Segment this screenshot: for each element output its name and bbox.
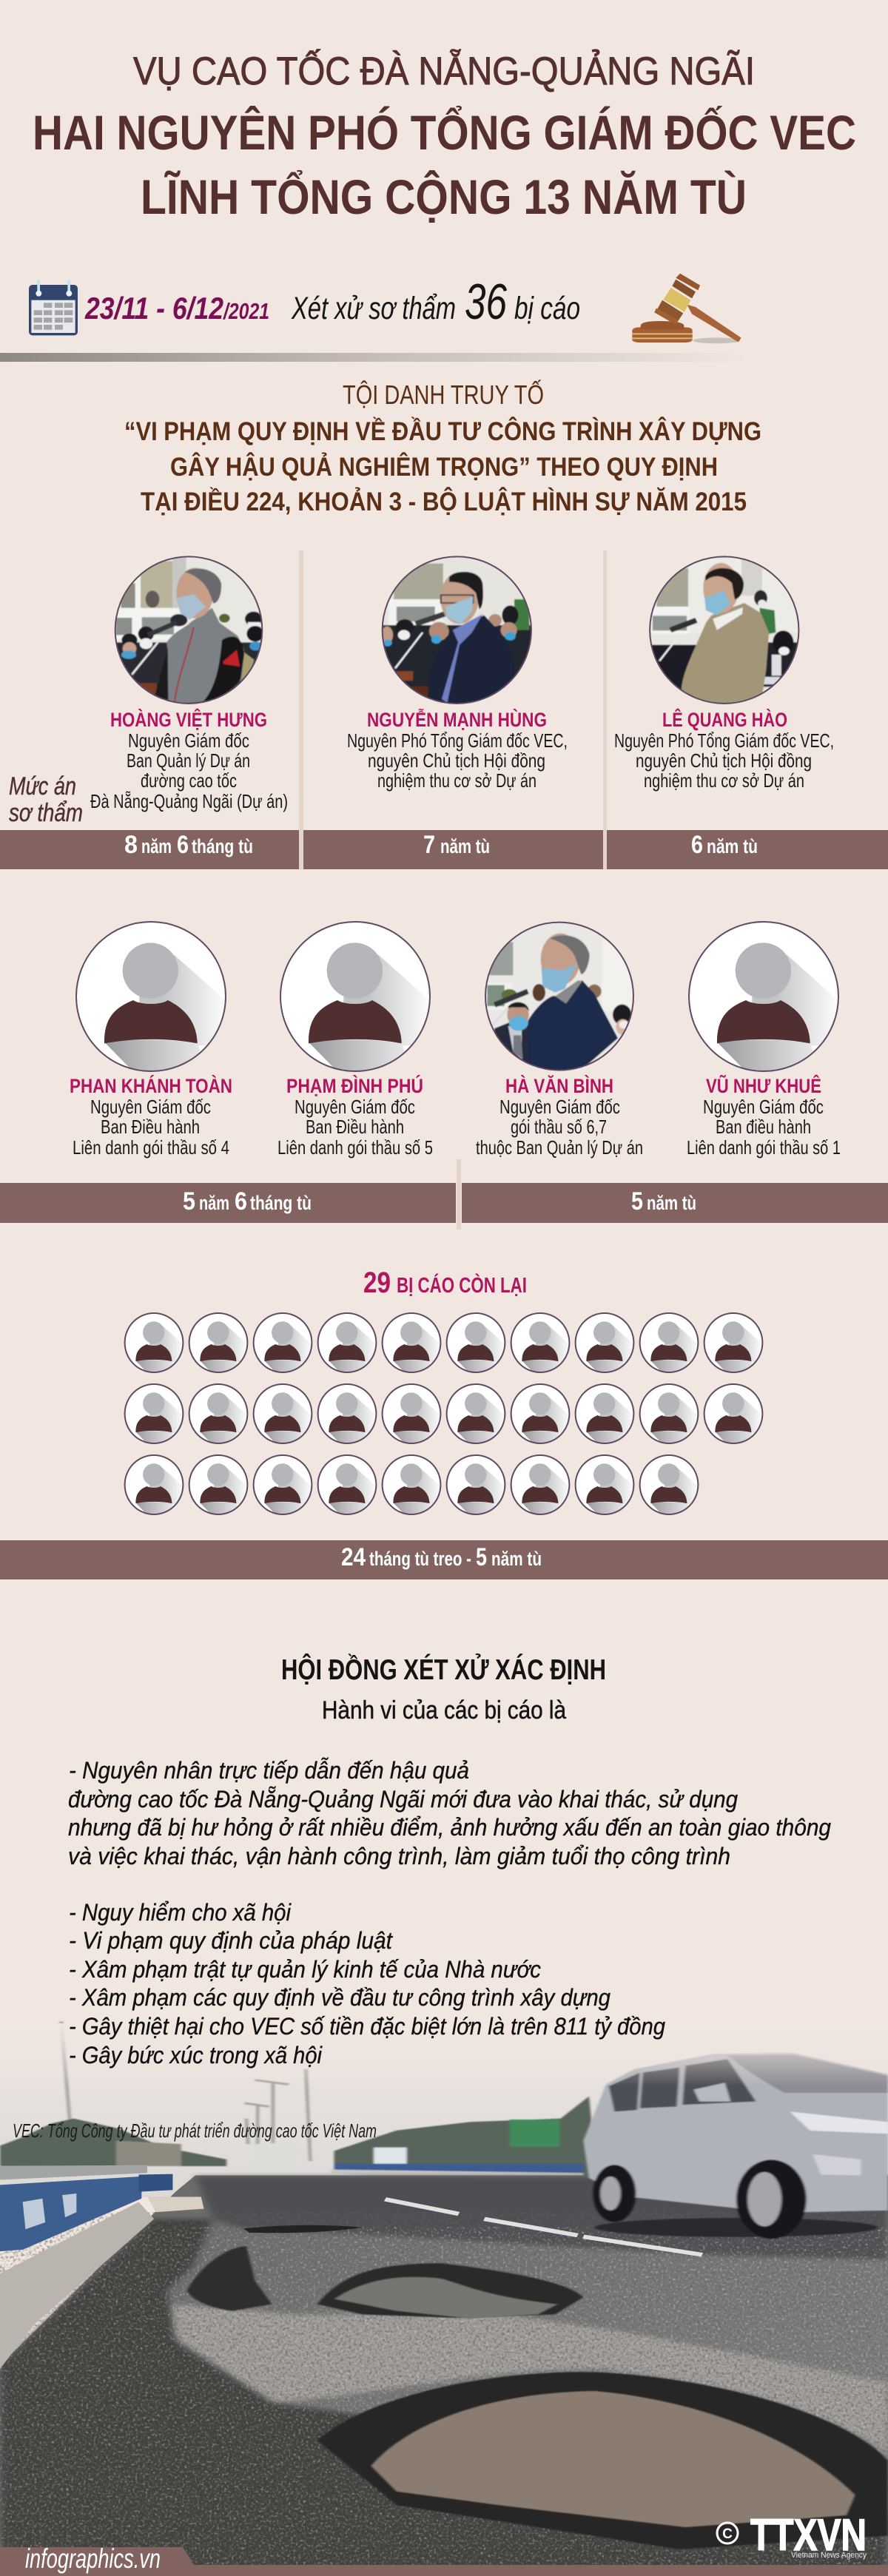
person 5: Phạm Đình Phú: Liên danh gói thầu số 5 (278, 1136, 433, 1159)
sentence bar: 5 years 6 months (0, 1183, 456, 1223)
sentence label: Mức án (9, 772, 76, 800)
sentence bar: 8 years 6 months: 6 (177, 831, 189, 859)
defendants count: Xét xử sơ thẩm (291, 291, 456, 326)
sentence bar: remaining defendants (0, 1540, 888, 1579)
sentence label: sơ thẩm (9, 799, 83, 827)
gravel texture (0, 2212, 888, 2576)
verdict paragraph (68, 1757, 831, 1869)
person 2: Nguyễn Mạnh Hùng: NGUYỄN MẠNH HÙNG (367, 708, 547, 731)
person 7: Vũ Như Khuê: Liên danh gói thầu số 1 (687, 1136, 841, 1159)
verdict paragraph: - Nguyên nhân trực tiếp dẫn đến hậu quả (69, 1757, 469, 1784)
person 7: Vũ Như Khuê: Ban điều hành (716, 1116, 811, 1138)
sentence bar: 6 years: năm tù (707, 835, 758, 857)
title (33, 48, 856, 224)
sentence bar: 5 years: 5 (631, 1187, 643, 1215)
title: VỤ CAO TỐC ĐÀ NẴNG-QUẢNG NGÃI (133, 48, 755, 93)
logo: TTXVN: Vietnam News Agency (791, 2551, 867, 2560)
sentence bar: 7 years (303, 830, 603, 869)
person 5: Phạm Đình Phú: PHẠM ĐÌNH PHÚ (286, 1074, 423, 1097)
logo: TTXVN (717, 2510, 867, 2560)
portrait placeholder: Phạm Đình Phú (275, 917, 437, 1076)
charge text: TẠI ĐIỀU 224, KHOẢN 3 - BỘ LUẬT HÌNH SỰ NĂM 2015 (141, 487, 747, 516)
person 5: Phạm Đình Phú: Nguyên Giám đốc (295, 1096, 415, 1118)
sentence bar: 5 years 6 months: 5 (183, 1187, 195, 1215)
person 1: Hoàng Việt Hưng (90, 708, 288, 812)
defendants count: 36 (465, 274, 507, 330)
title: LĨNH TỔNG CỘNG 13 NĂM TÙ (141, 169, 747, 224)
sentence bar: 6 years (607, 830, 888, 869)
sentence bar: 5 years: năm tù (647, 1192, 696, 1214)
verdict list (69, 1899, 665, 2068)
person 6: Hà Văn Bình: Nguyên Giám đốc (500, 1096, 620, 1118)
icon grid: 29 defendants (122, 1312, 765, 1516)
heading: remaining defendants (363, 1267, 527, 1299)
sentence label (9, 772, 83, 827)
footer strip: infographics.vn: infographics.vn (25, 2543, 161, 2574)
person 7: Vũ Như Khuê: Nguyên Giám đốc (703, 1096, 824, 1118)
sentence bar: 5 years 6 months: tháng tù (250, 1192, 312, 1214)
person 6: Hà Văn Bình: HÀ VĂN BÌNH (505, 1074, 613, 1097)
sentence bar: 5 years (462, 1183, 888, 1223)
person 1: Hoàng Việt Hưng: Ban Quản lý Dự án (127, 749, 250, 772)
verdict list: - Nguy hiểm cho xã hội (69, 1899, 292, 1926)
trial dates: 23/11 - 6/12 (84, 291, 223, 326)
charge heading: TỘI DANH TRUY TỐ (343, 379, 544, 410)
sentence bar: remaining defendants: tháng tù treo - (369, 1548, 471, 1570)
person 1: Hoàng Việt Hưng: Nguyên Giám đốc (128, 729, 249, 752)
charge text (124, 417, 761, 516)
person 6: Hà Văn Bình: gói thầu số 6,7 (511, 1116, 607, 1138)
trial dates: /2021 (222, 298, 269, 324)
sentence bar: 8 years 6 months (0, 830, 299, 869)
sentence bar: 8 years 6 months: tháng tù (192, 835, 253, 857)
portrait: Hà Văn Bình (485, 922, 634, 1071)
portrait: Hoàng Việt Hưng (114, 556, 263, 704)
person 7: Vũ Như Khuê (687, 1074, 841, 1159)
verdict list: - Vi phạm quy định của pháp luật (69, 1927, 393, 1954)
charge text: “VI PHẠM QUY ĐỊNH VỀ ĐẦU TƯ CÔNG TRÌNH XÂY DỰNG (124, 417, 761, 446)
verdict paragraph: và việc khai thác, vận hành công trình, làm giảm tuổi thọ công trình (68, 1843, 730, 1869)
portrait: Nguyễn Mạnh Hùng (382, 556, 532, 704)
sentence bar: remaining defendants: năm tù (491, 1548, 542, 1570)
person 4: Phan Khánh Toàn: Ban Điều hành (101, 1116, 200, 1138)
sentence bar: 6 years: 6 (691, 831, 703, 859)
person 3: Lê Quang Hào: nguyên Chủ tịch Hội đồng (636, 749, 812, 772)
person 6: Hà Văn Bình: thuộc Ban Quản lý Dự án (476, 1136, 643, 1159)
person 4: Phan Khánh Toàn: Nguyên Giám đốc (90, 1096, 211, 1118)
heading: remaining defendants: BỊ CÁO CÒN LẠI (397, 1272, 527, 1298)
sentence bar: remaining defendants: 5 (476, 1543, 487, 1571)
person 2: Nguyễn Mạnh Hùng (347, 708, 568, 792)
sentence bar: 5 years 6 months: năm (199, 1192, 229, 1214)
verdict list: - Gây bức xúc trong xã hội (69, 2042, 323, 2068)
defendants count: bị cáo (514, 291, 580, 326)
portrait: Lê Quang Hào (649, 556, 799, 704)
footer strip: infographics.vn (0, 2543, 888, 2576)
person 5: Phạm Đình Phú: Ban Điều hành (306, 1116, 404, 1138)
person 3: Lê Quang Hào: nghiệm thu cơ sở Dự án (644, 769, 804, 792)
verdict list: - Xâm phạm trật tự quản lý kinh tế của Nhà nước (69, 1956, 541, 1983)
verdict list: - Xâm phạm các quy định về đầu tư công trình xây dựng (69, 1984, 610, 2011)
person 7: Vũ Như Khuê: VŨ NHƯ KHUÊ (706, 1074, 821, 1097)
verdict heading: HỘI ĐỒNG XÉT XỬ XÁC ĐỊNH (281, 1653, 606, 1686)
photo: damaged expressway (0, 2021, 888, 2576)
icon: gavel (632, 274, 741, 343)
icon: calendar (29, 280, 78, 335)
person 6: Hà Văn Bình (476, 1074, 643, 1159)
sentence bar: 8 years 6 months: 8 (124, 831, 138, 859)
verdict paragraph: nhưng đã bị hư hỏng ở rất nhiều điểm, ảnh hưởng xấu đến an toàn giao thông (68, 1814, 831, 1841)
person 3: Lê Quang Hào (614, 708, 834, 792)
verdict paragraph: đường cao tốc Đà Nẵng-Quảng Ngãi mới đưa vào khai thác, sử dụng (68, 1786, 738, 1813)
person 2: Nguyễn Mạnh Hùng: Nguyên Phó Tổng Giám đốc VEC, (347, 729, 568, 752)
charge text: GÂY HẬU QUẢ NGHIÊM TRỌNG” THEO QUY ĐỊNH (170, 452, 718, 482)
person 4: Phan Khánh Toàn: PHAN KHÁNH TOÀN (70, 1074, 232, 1097)
sentence bar: remaining defendants: 24 (341, 1543, 366, 1571)
person 1: Hoàng Việt Hưng: Đà Nẵng-Quảng Ngãi (Dự án) (90, 790, 288, 812)
sentence bar: 7 years: năm tù (440, 835, 490, 857)
person 1: Hoàng Việt Hưng: đường cao tốc (141, 769, 237, 792)
person 4: Phan Khánh Toàn (70, 1074, 232, 1159)
verdict list: - Gây thiệt hại cho VEC số tiền đặc biệt lớn là trên 811 tỷ đồng (69, 2013, 665, 2040)
heading: remaining defendants: 29 (363, 1267, 391, 1299)
person 2: Nguyễn Mạnh Hùng: nghiệm thu cơ sở Dự án (377, 769, 536, 792)
portrait placeholder: Phan Khánh Toàn (70, 917, 233, 1076)
person 5: Phạm Đình Phú (278, 1074, 433, 1159)
sentence bar: 5 years 6 months: 6 (235, 1187, 247, 1215)
person 3: Lê Quang Hào: LÊ QUANG HÀO (662, 708, 787, 731)
person 2: Nguyễn Mạnh Hùng: nguyên Chủ tịch Hội đồng (368, 749, 545, 772)
verdict subheading: Hành vi của các bị cáo là (322, 1696, 566, 1724)
column dividers (299, 550, 607, 869)
portrait placeholder: Vũ Như Khuê (683, 917, 846, 1076)
person 4: Phan Khánh Toàn: Liên danh gói thầu số 4 (73, 1136, 229, 1159)
person 1: Hoàng Việt Hưng: HOÀNG VIỆT HƯNG (110, 708, 267, 731)
footnote: VEC: Tổng Công ty Đầu tư phát triển đường cao tốc Việt Nam (13, 2120, 377, 2142)
sentence bar: 8 years 6 months: năm (141, 835, 172, 857)
gradient divider (0, 353, 747, 362)
defendants count (291, 274, 580, 330)
logo: TTXVN: C (722, 2526, 733, 2542)
sentence bar: 7 years: 7 (423, 831, 435, 859)
